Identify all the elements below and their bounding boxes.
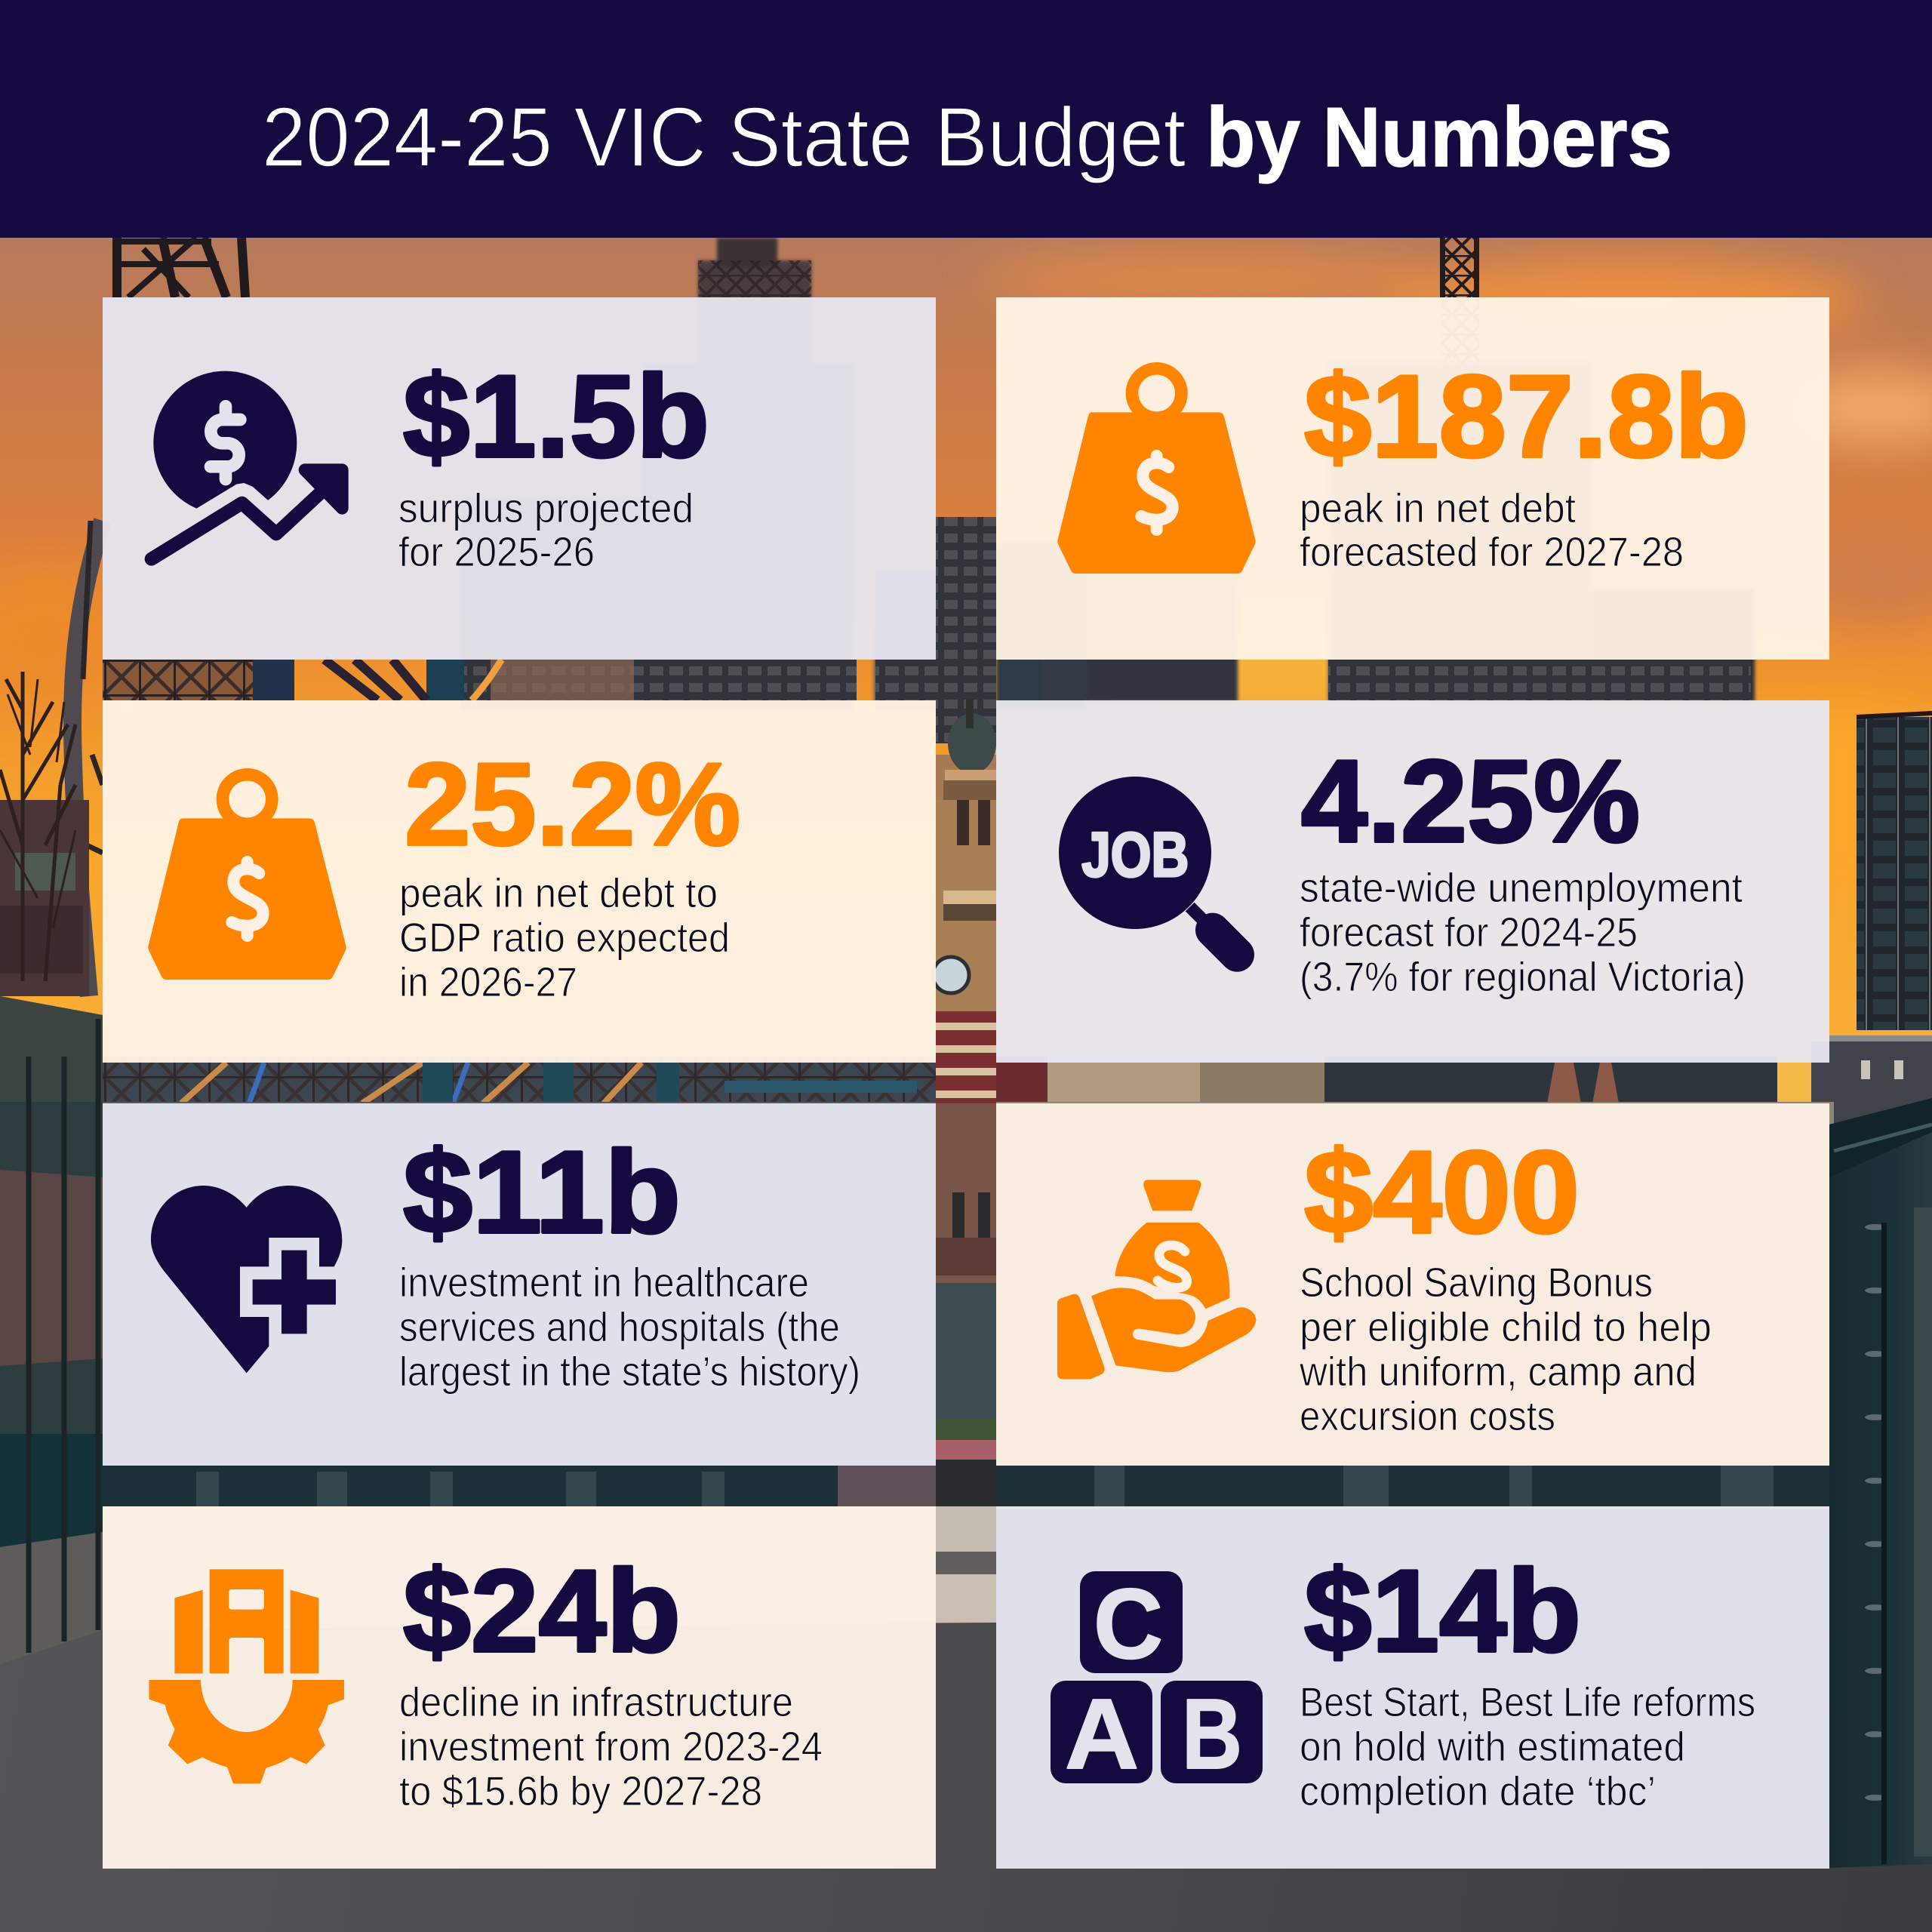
stat: $1.5b: $1.5b <box>403 351 709 481</box>
stat: $24b: $24b <box>403 1546 681 1676</box>
clock tower <box>936 800 996 1026</box>
row 2-3 gap backdrop <box>103 1057 936 1109</box>
left glass building <box>0 996 103 1664</box>
icon: alphabet blocks: A <box>1065 1678 1139 1789</box>
description <box>1300 864 1746 1000</box>
stat: $400: $400 <box>1304 1127 1580 1257</box>
description: with uniform, camp and <box>1299 1348 1697 1395</box>
description: investment from 2023-24 <box>399 1723 823 1770</box>
description: GDP ratio expected <box>399 914 730 961</box>
title bold part: by Numbers <box>1206 91 1672 184</box>
panel: unemployment <box>996 700 1829 1063</box>
icon: heart with cross <box>151 1186 342 1373</box>
lower city body <box>103 1102 936 1479</box>
icon: building on gear <box>149 1569 344 1783</box>
description: services and hospitals (the <box>399 1303 840 1350</box>
icon: alphabet blocks <box>1051 1568 1263 1789</box>
description: per eligible child to help <box>1300 1303 1712 1350</box>
title: 2024-25 VIC State Budget <box>262 91 1186 184</box>
description: for 2025-26 <box>398 528 595 575</box>
right bridge <box>1829 1098 1932 1868</box>
left bare trees and building <box>0 800 89 996</box>
description <box>1299 1259 1712 1439</box>
description: state-wide unemployment <box>1300 864 1743 911</box>
icon: debt weight <box>148 774 346 980</box>
panel: surplus <box>103 297 936 660</box>
description: Best Start, Best Life reforms <box>1300 1678 1755 1725</box>
icon: job magnifier <box>1059 777 1237 955</box>
icon: coin with rising arrow <box>152 371 342 559</box>
ground <box>0 1509 1932 1932</box>
description <box>1300 485 1684 575</box>
panel: healthcare <box>103 1103 936 1466</box>
description: in 2026-27 <box>399 958 577 1005</box>
icon: alphabet blocks: B <box>1182 1678 1242 1789</box>
icon label: JOB: JOB <box>1081 820 1189 890</box>
distant towers <box>460 238 1755 709</box>
icon: alphabet blocks: C <box>1094 1568 1163 1679</box>
panel: school saving bonus <box>996 1103 1829 1466</box>
icon: money bag in hand <box>1057 1180 1256 1379</box>
panel: debt to GDP <box>103 700 936 1063</box>
description: (3.7% for regional Victoria) <box>1300 953 1746 1000</box>
description <box>399 869 730 1005</box>
header band <box>0 0 1932 238</box>
stat: $187.8b: $187.8b <box>1304 351 1749 481</box>
panel: infrastructure <box>103 1506 936 1869</box>
description: to $15.6b by 2027-28 <box>399 1767 762 1814</box>
description <box>1300 1678 1755 1814</box>
description: forecasted for 2027-28 <box>1300 528 1684 575</box>
panel: net debt <box>996 297 1829 660</box>
description <box>399 1678 823 1814</box>
dark railing band <box>103 1466 936 1506</box>
left ferris wheel and truss <box>113 238 245 297</box>
description: forecast for 2024-25 <box>1300 909 1638 955</box>
panel: best start best life <box>996 1506 1829 1869</box>
description: investment in healthcare <box>399 1259 809 1306</box>
description: completion date ‘tbc’ <box>1300 1767 1656 1814</box>
stat: 25.2%: 25.2% <box>405 739 740 869</box>
description <box>399 1259 860 1395</box>
stat: $11b: $11b <box>403 1127 681 1257</box>
description <box>398 485 694 575</box>
description: peak in net debt to <box>399 869 718 916</box>
description: on hold with estimated <box>1300 1723 1685 1770</box>
description: surplus projected <box>398 485 694 531</box>
stat: 4.25%: 4.25% <box>1301 736 1640 866</box>
icon: debt weight <box>1057 368 1256 574</box>
description: excursion costs <box>1300 1392 1555 1439</box>
stat: $14b: $14b <box>1304 1546 1581 1676</box>
description: School Saving Bonus <box>1300 1259 1653 1306</box>
description: decline in infrastructure <box>399 1678 793 1725</box>
right building <box>1857 717 1932 1030</box>
description: largest in the state’s history) <box>399 1348 860 1395</box>
description: peak in net debt <box>1300 485 1576 531</box>
